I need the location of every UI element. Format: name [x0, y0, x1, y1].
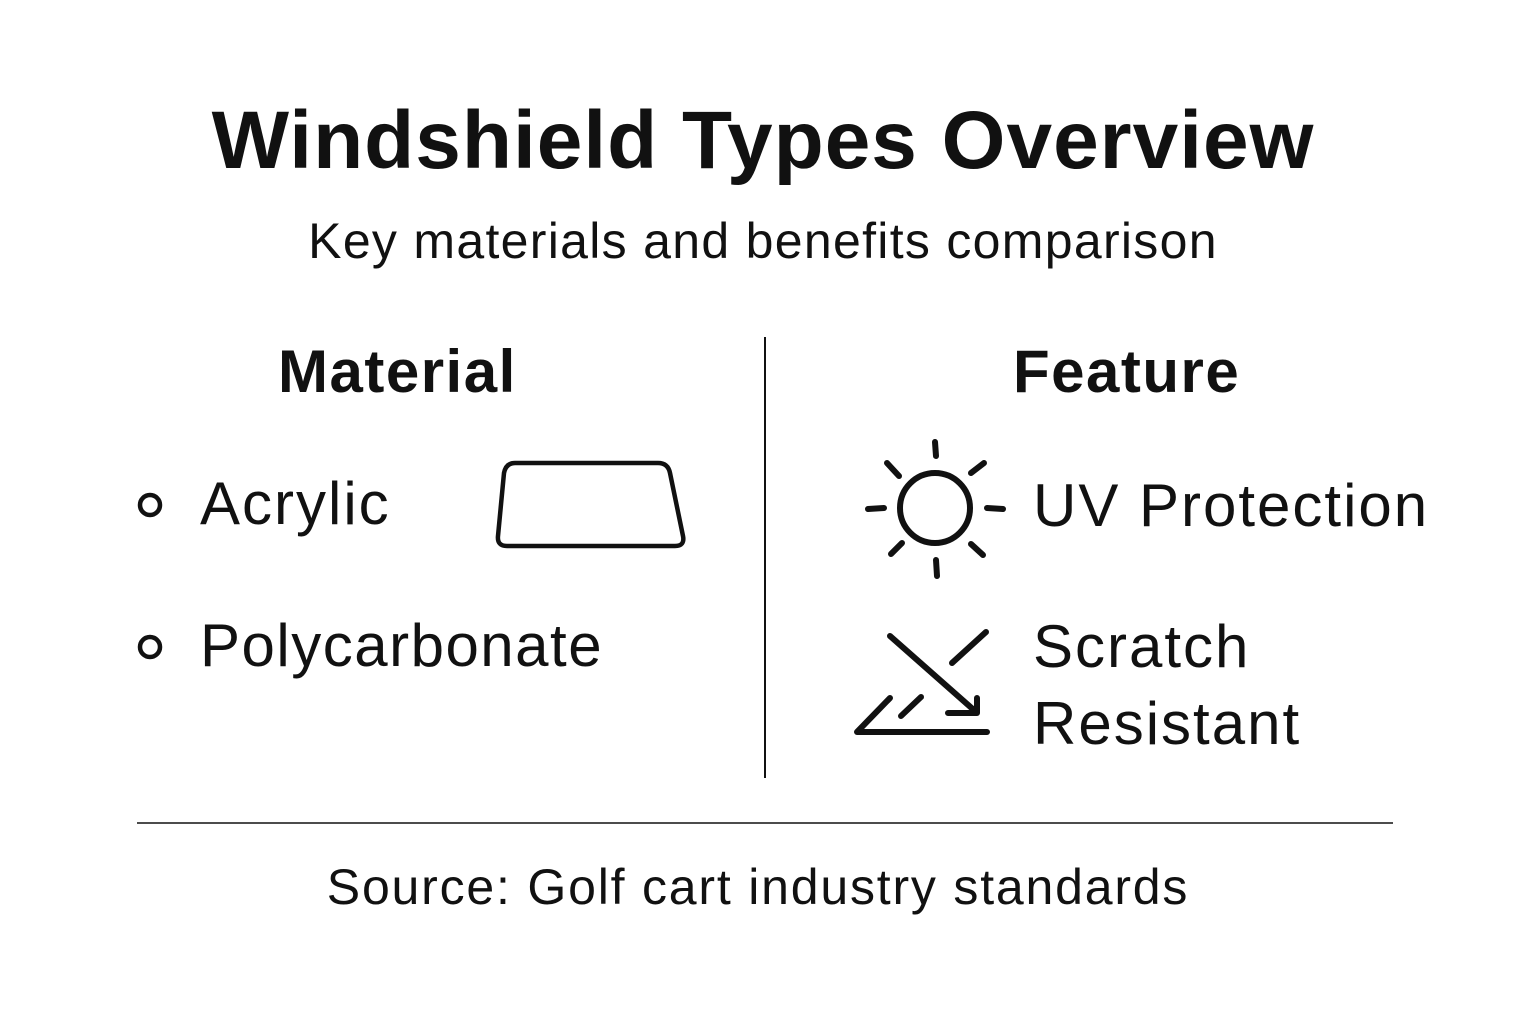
heading: feature: Feature: [1013, 338, 1240, 405]
panel: material: [200, 338, 603, 679]
icon: sun: [868, 442, 1003, 576]
icon: scratch: [857, 632, 987, 732]
divider: [764, 337, 766, 778]
icon: windshield: [498, 463, 683, 546]
item: scratch resistant: Scratch: [1033, 613, 1250, 680]
subtitle: Key materials and benefits comparison: [308, 213, 1218, 269]
heading: material: Material: [278, 338, 517, 405]
footer rule: [137, 822, 1393, 824]
item: acrylic: Acrylic: [200, 470, 391, 537]
item: scratch resistant: Resistant: [1033, 690, 1301, 757]
title: Windshield Types Overview: [212, 95, 1314, 186]
bullet: polycarbonate: [140, 637, 160, 657]
item: uv protection: UV Protection: [1033, 472, 1429, 539]
source note: Source: Golf cart industry standards: [327, 859, 1189, 915]
item: scratch resistant: [1033, 613, 1301, 757]
item: polycarbonate: Polycarbonate: [200, 612, 603, 679]
panel: feature: [1013, 338, 1429, 757]
bullet: acrylic: [140, 495, 160, 515]
